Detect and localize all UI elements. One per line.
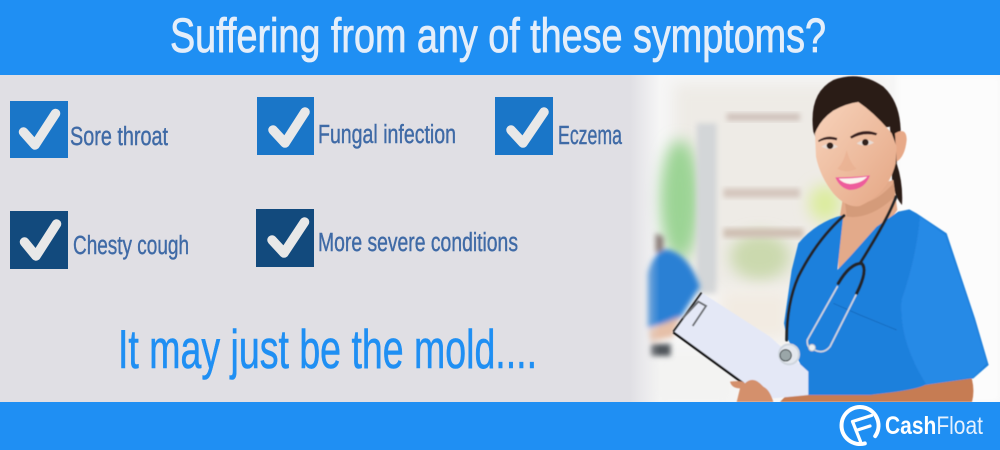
face [815, 102, 897, 206]
symptom: chesty cough [10, 211, 189, 269]
label: Sore throat [70, 123, 168, 151]
smile [835, 175, 870, 190]
blue scrubs [784, 209, 989, 402]
ear [895, 131, 907, 162]
label: Fungal infection [318, 121, 456, 149]
checkbox [256, 209, 314, 267]
symptom: sore throat [10, 101, 168, 158]
symptom: eczema [495, 97, 623, 155]
symptom: fungal infection [257, 97, 456, 155]
blurred colleague in background [647, 233, 700, 356]
photo: nurse with clipboard [630, 75, 1000, 407]
neck shadow [845, 183, 895, 217]
photo backdrop [630, 75, 1000, 407]
wordmark: CashFloat [885, 412, 983, 440]
hand [730, 380, 773, 402]
tagline: It may just be the mold.... [118, 318, 537, 380]
neck and chest [838, 180, 897, 270]
Cashfloat logo [842, 407, 983, 444]
header bar [0, 0, 1000, 75]
checkbox [10, 211, 68, 269]
sleeve highlight [901, 217, 987, 385]
checkbox [10, 101, 68, 158]
checkbox [257, 97, 314, 155]
title: Suffering from any of these symptoms? [170, 10, 826, 63]
page background [0, 75, 1000, 402]
label: More severe conditions [318, 229, 518, 257]
symptom: more severe conditions [256, 209, 518, 267]
logo emblem [842, 407, 879, 444]
checkbox [495, 97, 553, 155]
stethoscope [779, 197, 896, 364]
label: Eczema [558, 122, 623, 150]
clipboard [673, 293, 808, 398]
nose [838, 152, 854, 171]
hair [812, 76, 902, 205]
footer bar [0, 402, 1000, 450]
forearm [780, 378, 973, 402]
left fade into page [630, 75, 660, 402]
pocket seam [833, 303, 897, 330]
label: Chesty cough [73, 232, 189, 260]
eyes and brows [818, 131, 877, 149]
